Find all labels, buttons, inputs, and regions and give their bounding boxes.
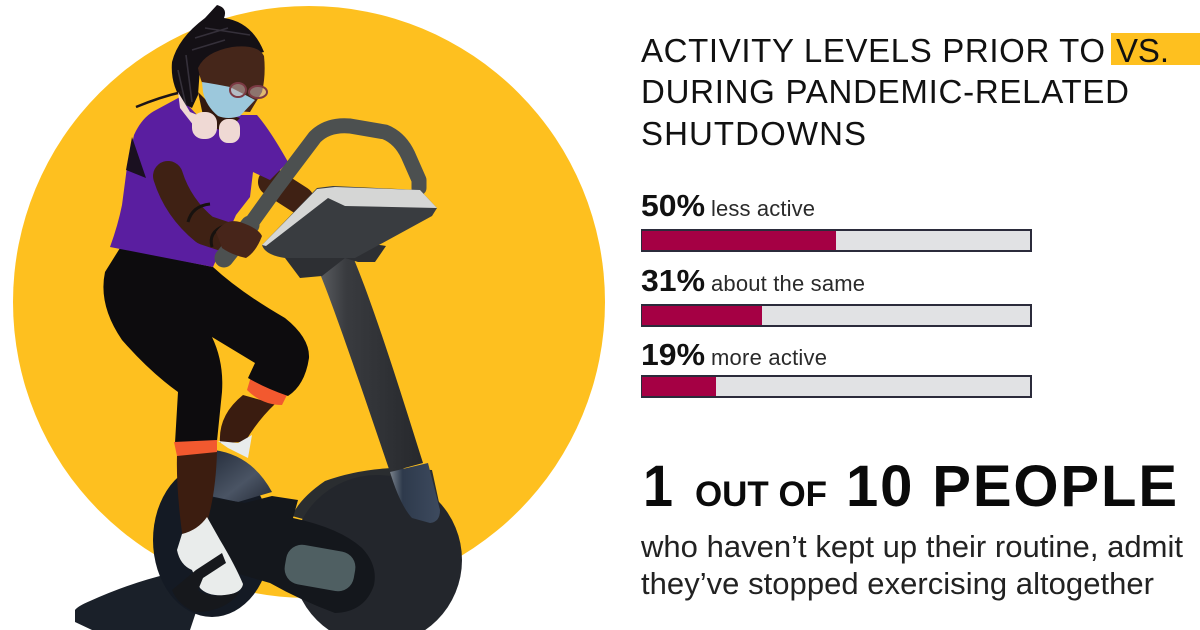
- wristband: [188, 204, 224, 247]
- highlight behind VS.: [1111, 33, 1200, 65]
- shirt: [110, 97, 288, 267]
- title: VS.: [1116, 32, 1169, 69]
- row: 31% about the same: about the same: [711, 271, 865, 296]
- title: [641, 32, 1200, 152]
- row: 19% more active: [641, 337, 1031, 397]
- bike crank arm: [205, 496, 375, 613]
- title: DURING PANDEMIC-RELATED: [641, 73, 1129, 110]
- headline statistic: OUT OF: [695, 475, 827, 514]
- bar chart: activity levels: [641, 188, 1031, 397]
- supporting text: they’ve stopped exercising altogether: [641, 566, 1154, 601]
- handlebar: [232, 126, 419, 250]
- front shoe: [177, 517, 243, 595]
- console: [262, 186, 437, 278]
- far arm: [272, 182, 300, 200]
- face: [198, 46, 265, 112]
- pedal strap: [172, 553, 240, 612]
- flywheel hump: [205, 450, 272, 502]
- title: ACTIVITY LEVELS PRIOR TO: [641, 32, 1105, 69]
- headline statistic: 10 PEOPLE: [846, 454, 1177, 519]
- row: 31% about the same: [641, 263, 1031, 326]
- main flywheel housing: [292, 468, 462, 630]
- yellow circle background: [13, 6, 605, 598]
- near arm: [168, 176, 235, 240]
- rear shoe: [218, 435, 252, 458]
- post collar: [390, 463, 440, 523]
- row: 50% less active: [641, 188, 1031, 251]
- post: [313, 250, 423, 472]
- row: 19% more active: more active: [711, 345, 827, 370]
- hair: [136, 5, 264, 108]
- headline statistic: 1: [643, 454, 673, 519]
- shirt shadow strap: [126, 137, 146, 178]
- hand: [216, 221, 262, 258]
- rear leg cuff: [247, 373, 288, 405]
- tights: [103, 248, 309, 443]
- photo: woman on exercise bike: [75, 5, 462, 630]
- title: SHUTDOWNS: [641, 115, 866, 152]
- handlebar grip: [224, 225, 250, 258]
- glasses: [230, 83, 267, 98]
- front calf: [177, 451, 217, 540]
- crank window: [282, 542, 358, 594]
- row: 19% more active: 19%: [641, 337, 705, 372]
- rear leg calf: [220, 395, 275, 443]
- headphones: [178, 92, 240, 143]
- neck: [198, 92, 240, 132]
- row: 50% less active: 50%: [641, 188, 705, 223]
- supporting text: who haven’t kept up their routine, admit: [640, 529, 1183, 564]
- face mask: [202, 82, 255, 118]
- bike foot base: [75, 574, 200, 630]
- row: 50% less active: less active: [711, 196, 815, 221]
- front cuff: [174, 440, 217, 456]
- row: 31% about the same: 31%: [641, 263, 705, 298]
- supporting text: [640, 529, 1183, 601]
- headline statistic: [643, 454, 1177, 519]
- rear flywheel disc: [153, 463, 271, 617]
